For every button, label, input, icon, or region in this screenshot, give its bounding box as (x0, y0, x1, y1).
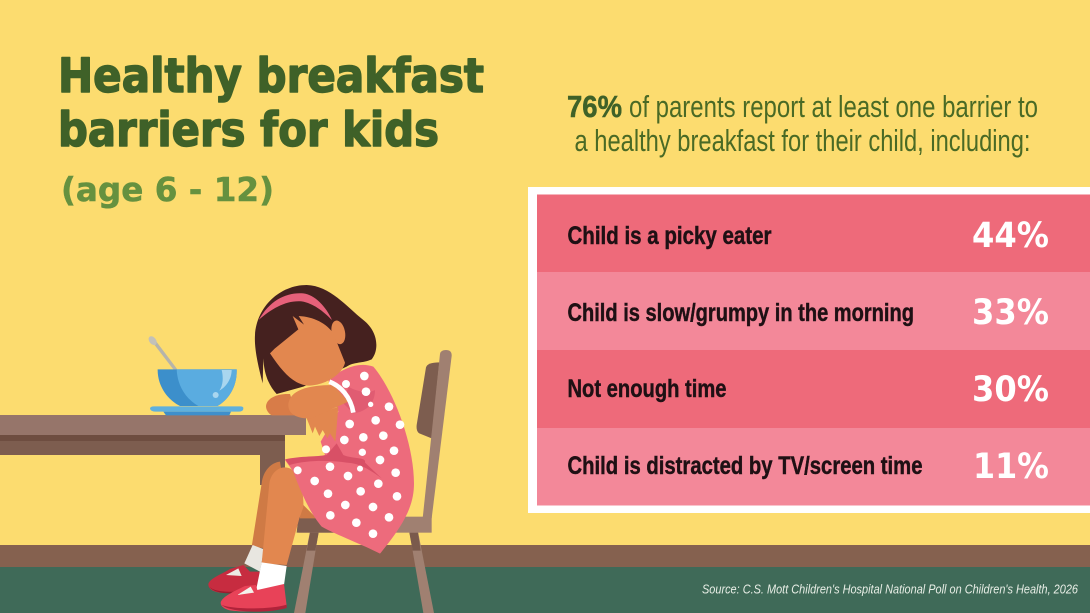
hanging hand (307, 407, 338, 442)
white polka dots (294, 372, 404, 538)
row: slow or grumpy (537, 272, 1090, 350)
near shoe (221, 584, 287, 612)
white sleeve cuff (329, 382, 353, 413)
near arm (288, 385, 348, 418)
far leg and sock (244, 462, 287, 572)
panel: barriers table (528, 187, 1090, 513)
ear (329, 319, 347, 345)
intro statement: 76% (567, 89, 622, 124)
row: distracted by screens (537, 428, 1090, 506)
face (270, 316, 345, 386)
illustration: girl slumped at breakfast table (0, 285, 452, 613)
icon: blue bowl and saucer (150, 369, 243, 415)
chair (294, 350, 452, 613)
row: slow or grumpy: Child is slow/grumpy in the morning (568, 299, 914, 327)
floor (0, 567, 1090, 613)
hair (255, 285, 376, 394)
far hand on table (266, 394, 297, 415)
skin under dress (298, 500, 317, 518)
row: distracted by screens: 11% (973, 447, 1049, 487)
table (0, 415, 306, 485)
row: distracted by screens: Child is distracted by TV/screen time (568, 452, 923, 480)
row: not enough time: 30% (972, 370, 1049, 410)
row: picky eater: Child is a picky eater (568, 222, 772, 250)
row: picky eater: 44% (972, 216, 1049, 256)
subtitle: age range: (age 6 - 12) (61, 170, 274, 209)
row: picky eater (537, 194, 1090, 272)
icon: spoon (147, 335, 177, 369)
pink headband (259, 293, 332, 320)
title (58, 49, 484, 158)
pink polka dot dress (285, 365, 414, 554)
row: not enough time: Not enough time (568, 375, 727, 403)
row: not enough time (537, 350, 1090, 428)
baseboard (0, 545, 1090, 567)
intro statement (567, 89, 1038, 158)
row: slow or grumpy: 33% (972, 293, 1049, 333)
near sock (256, 562, 287, 591)
near leg (262, 467, 303, 565)
title: barriers for kids (58, 103, 439, 158)
far shoe (208, 565, 260, 593)
title: Healthy breakfast (58, 49, 484, 104)
girl (208, 285, 414, 612)
